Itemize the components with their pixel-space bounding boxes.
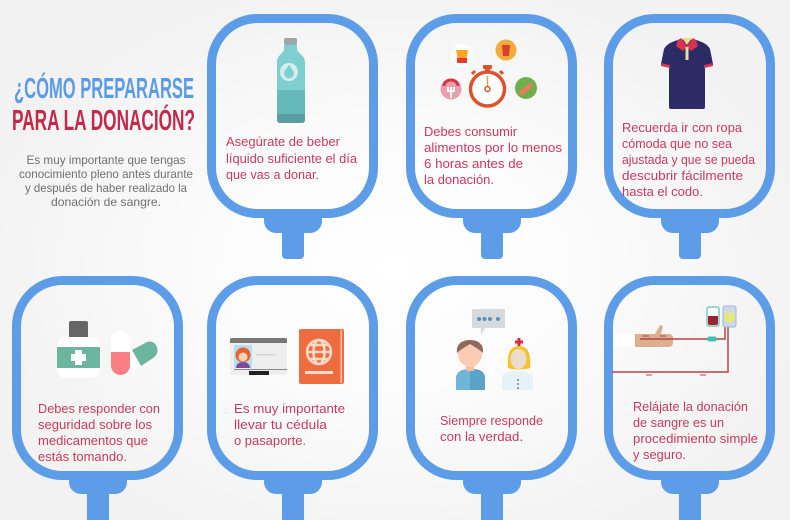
text: identification	[234, 401, 345, 448]
text: medication: seguridad sobre los	[38, 417, 152, 432]
text: bottle: Asegúrate de beber	[226, 134, 341, 149]
icon: polo shirt	[661, 38, 713, 109]
icon: transfusion diagram	[612, 306, 736, 375]
text: medication: Debes responder con	[38, 401, 160, 416]
title: ¿CÓMO PREPARARSE	[14, 71, 194, 105]
panel: food timing	[410, 18, 572, 259]
text: food timing: Debes consumir	[424, 124, 518, 139]
panel: honesty	[410, 280, 572, 520]
icon: speech bubble	[472, 309, 505, 335]
text: honesty	[440, 413, 543, 444]
text: honesty: con la verdad.	[440, 429, 523, 444]
text: relax: procedimiento simple	[633, 431, 758, 446]
text: identification: Es muy importante	[234, 401, 345, 416]
icon: water bottle	[277, 38, 305, 123]
icon: stopwatch and food	[440, 40, 537, 106]
text: bottle	[226, 134, 358, 182]
text: medication: medicamentos que	[38, 433, 148, 448]
panel: bottle	[212, 18, 374, 259]
intro text: donación de sangre.	[51, 195, 161, 209]
text: medication: estás tomando.	[38, 449, 127, 464]
text: identification: llevar tu cédula	[234, 417, 328, 432]
text: clothing: Recuerda ir con ropa	[622, 120, 743, 135]
text: clothing	[622, 120, 756, 199]
text: clothing: descubrir fácilmente	[622, 168, 743, 183]
text: identification: o pasaporte.	[234, 433, 306, 448]
text: bottle: líquido suficiente el día	[226, 151, 358, 166]
panel: identification	[212, 280, 374, 520]
title: PARA LA DONACIÓN?	[12, 103, 195, 137]
text: food timing: 6 horas antes de	[424, 156, 523, 171]
icon: patient	[456, 340, 485, 390]
text: clothing: ajustada y que se pueda	[622, 152, 756, 167]
text: food timing: la donación.	[424, 172, 494, 187]
text: bottle: que vas a donar.	[226, 167, 319, 182]
text: honesty: Siempre responde	[440, 413, 543, 428]
icon: passport	[299, 329, 344, 384]
text: relax: Relájate la donación	[633, 399, 748, 414]
text: medication	[38, 401, 160, 464]
intro text	[19, 153, 193, 209]
text: clothing: cómoda que no sea	[622, 136, 733, 151]
panel: medication	[16, 280, 178, 520]
panel: relax	[608, 280, 770, 520]
text: relax: y seguro.	[633, 447, 686, 462]
panel: clothing	[608, 18, 770, 259]
intro text: conocimiento pleno antes durante	[19, 167, 193, 181]
icon: id card	[230, 338, 287, 375]
text: clothing: hasta el codo.	[622, 184, 703, 199]
icon: medicine bottle and pills	[57, 321, 158, 378]
intro text: Es muy importante que tengas	[26, 153, 186, 167]
icon: nurse	[502, 338, 533, 390]
text: relax: de sangre es un	[633, 415, 724, 430]
text: food timing	[424, 124, 563, 187]
title	[12, 71, 195, 137]
text: relax	[633, 399, 758, 462]
intro text: y después de haber realizado la	[25, 181, 187, 195]
text: food timing: alimentos por lo menos	[424, 140, 563, 155]
